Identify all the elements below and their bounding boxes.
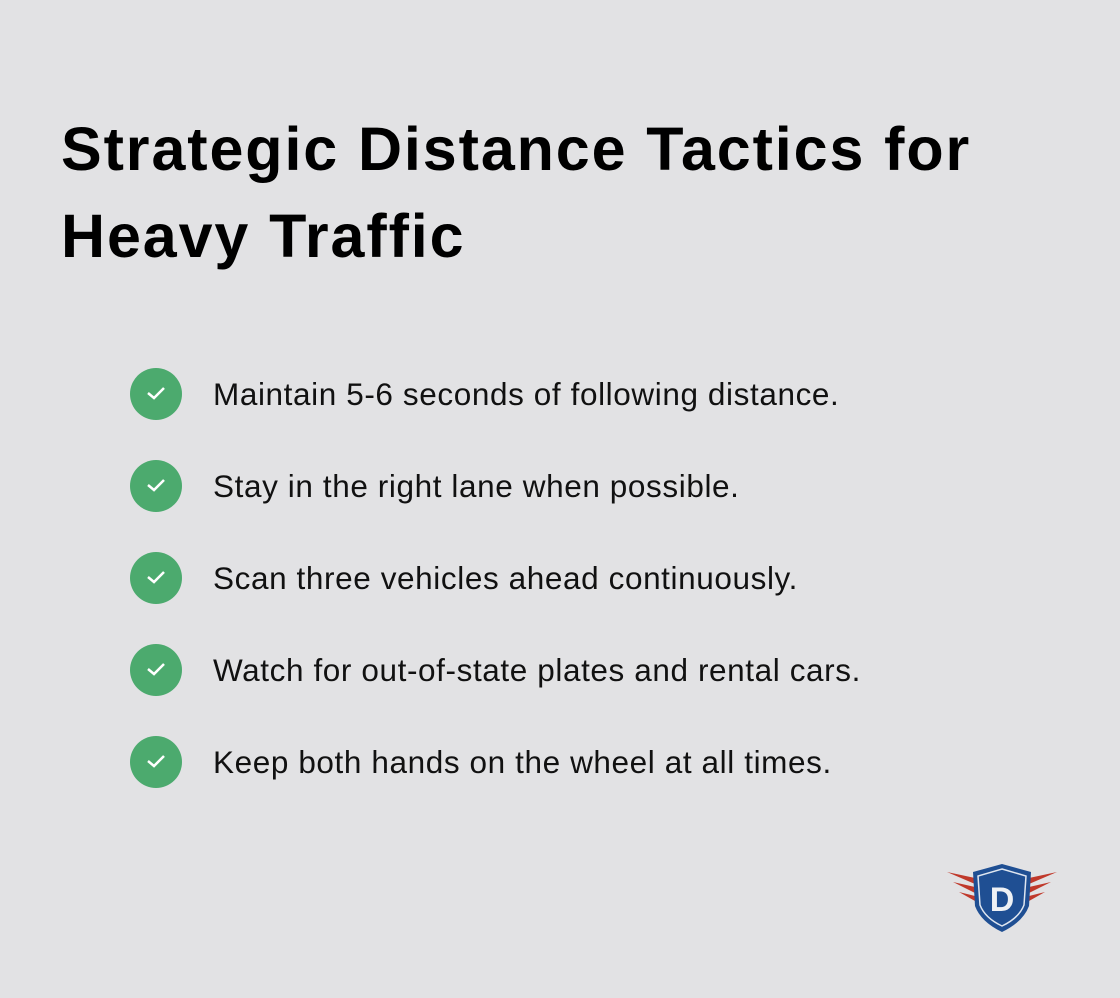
item 4: Watch for out-of-state plates and rental cars. bbox=[213, 652, 861, 688]
item 1: Maintain 5-6 seconds of following distance. bbox=[213, 376, 839, 412]
item 3: Scan three vehicles ahead continuously. bbox=[213, 560, 798, 596]
item 4 bbox=[130, 644, 861, 696]
logo bbox=[947, 864, 1057, 932]
title: Heavy Traffic bbox=[61, 202, 465, 270]
item 3 bbox=[130, 552, 798, 604]
item 2 bbox=[130, 460, 740, 512]
list bbox=[130, 368, 861, 788]
item 2: Stay in the right lane when possible. bbox=[213, 468, 740, 504]
logo: D bbox=[990, 881, 1014, 919]
item 1 bbox=[130, 368, 839, 420]
title: Strategic Distance Tactics for bbox=[61, 115, 971, 183]
item 5 bbox=[130, 736, 832, 788]
title bbox=[61, 115, 971, 270]
item 5: Keep both hands on the wheel at all times. bbox=[213, 744, 832, 780]
